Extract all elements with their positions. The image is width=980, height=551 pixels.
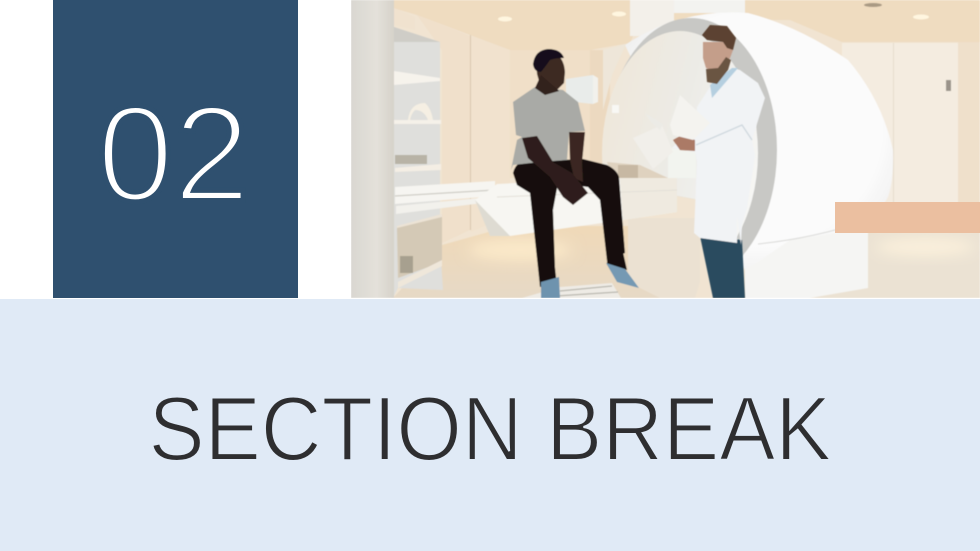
window in bore — [669, 149, 678, 177]
scanner bore ring — [602, 18, 777, 282]
shoe covers — [541, 277, 560, 298]
step stool — [522, 283, 621, 298]
collar — [710, 68, 738, 98]
scanner base — [745, 225, 868, 298]
hair — [702, 25, 736, 50]
shirt — [511, 87, 585, 170]
section number: 02 — [97, 78, 250, 230]
head — [536, 57, 566, 90]
number panel — [53, 0, 298, 298]
shelving unit — [394, 8, 415, 30]
peach accent bar — [835, 202, 980, 233]
scanner bore interior — [602, 30, 758, 236]
items on table — [607, 162, 668, 178]
near leg and far leg — [513, 159, 625, 287]
monitor on wall — [566, 75, 593, 104]
right wall — [842, 43, 958, 205]
hair — [533, 49, 564, 72]
ceiling lights — [498, 16, 512, 22]
gantry — [674, 0, 746, 14]
patient table — [478, 178, 623, 236]
photo: doctor and patient beside an MRI scanner — [351, 0, 980, 298]
scanner control panel — [603, 50, 611, 108]
patient table rails — [395, 181, 495, 204]
floor — [393, 226, 660, 298]
head — [702, 42, 733, 70]
far arm — [569, 132, 585, 182]
title: SECTION BREAK — [148, 379, 832, 480]
ceiling — [393, 0, 980, 50]
room background — [351, 0, 980, 298]
patient — [511, 49, 639, 298]
left pillar — [351, 0, 394, 298]
scanner drum — [625, 12, 893, 270]
hand — [673, 135, 695, 151]
beard — [706, 57, 731, 84]
jeans — [700, 236, 745, 298]
wall camera — [946, 80, 951, 91]
wall panels — [417, 15, 470, 243]
near arm and hands — [522, 136, 588, 205]
paperwork — [633, 125, 673, 169]
doctor — [633, 25, 765, 298]
lab coat — [672, 68, 765, 245]
console under table — [628, 226, 659, 297]
